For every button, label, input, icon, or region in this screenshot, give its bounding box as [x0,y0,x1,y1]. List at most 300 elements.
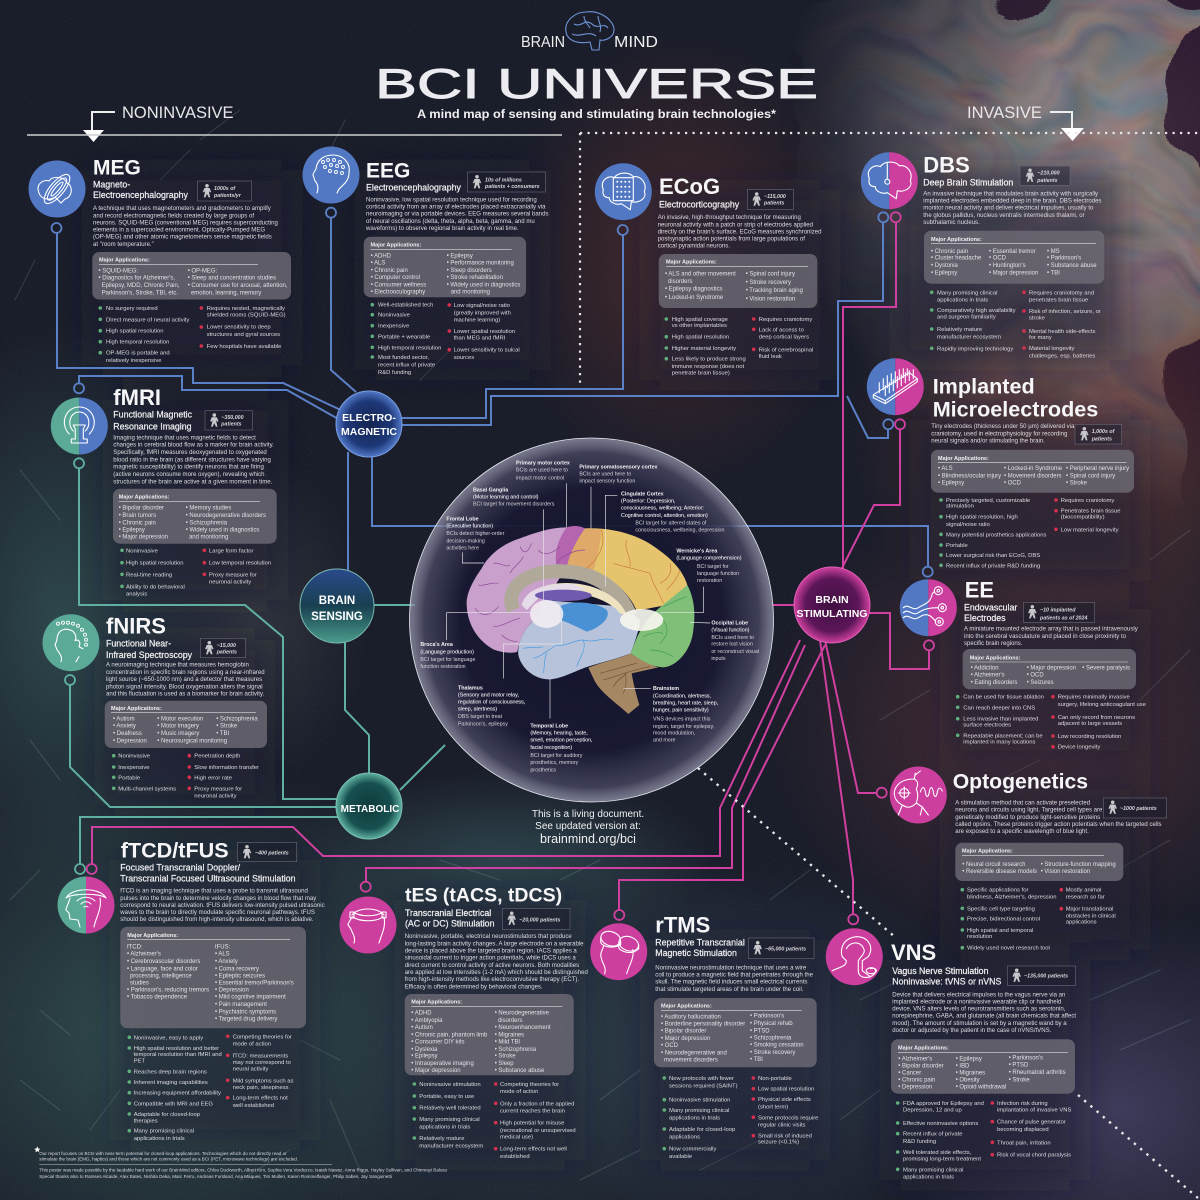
pros: FDA approved for Epilepsy and [903,1101,984,1107]
leader lines [447,483,710,718]
major applications [105,701,267,748]
hub: electromagnetic: MAGNETIC [341,426,397,438]
brain labels: restoration [697,578,722,584]
pros: Many potential prosthetics applications [946,532,1046,538]
cons: Competing theories for [233,1034,292,1040]
title: Optogenetics [953,770,1088,793]
noninvasive label and arrow: NONINVASIVE [122,104,234,122]
major applications: • Schizophrenia [216,716,258,722]
major applications: • Stroke [495,1054,516,1060]
description: directly on the brain's surface. ECoG measures synchronized [658,229,822,235]
cons: Low recording resolution [1058,734,1121,740]
description: sinusoidal current to trigger action potentials, while tDCS uses a [405,956,576,962]
major applications: • Mild TBI [495,1040,520,1046]
pros: surface electrodes [963,723,1011,729]
footnote: This poster was made possible by the laudable hard work of our BrainMind editors, Chloe Duckworth, Albert Kim, Sophia Vera Verduzco, Isaiah Nawaz, Anna Riggs, Hayley Sullivan, and Chinmayi Balusu [39,1167,448,1172]
major applications: • Coma recovery [215,966,259,972]
subtitle: Vagus Nerve Stimulation [892,966,989,976]
title: EEG [366,159,410,182]
major applications: • Neurodegenerative and [661,1050,727,1056]
patient badge [1103,798,1167,818]
major applications: • ADHD [411,1011,432,1017]
description: An invasive, high-throughput technique for measuring [658,215,801,221]
pros: Increasing equipment affordability [134,1091,221,1097]
patient badge [198,181,252,201]
cons [752,317,813,360]
major applications: • OCD [1027,673,1044,679]
cons: Major translational [1066,907,1113,913]
major applications: disorders [498,1018,522,1024]
pros [939,498,1046,569]
subtitle: Electroencephalography [93,190,188,200]
pros: Adaptable for closed-loop [134,1112,200,1118]
major applications: • Parkinson's [1047,256,1081,262]
title: MEG [93,156,141,180]
major applications: • Auditory hallucination [661,1014,721,1020]
description: device. VNS alters levels of neurotransmitters such as serotonin, [892,1006,1066,1012]
major applications: tFUS: [215,945,231,951]
panel: ECoG [595,163,822,377]
description: mood). The amount of stimulation is set by a magnetic wand by a [892,1021,1067,1027]
header: logo [521,12,658,51]
major applications: • Migraines [495,1032,524,1038]
major applications: • Parkinson's, reducing tremors [127,987,209,993]
major applications: • Locked-in Syndrome [665,295,724,301]
cons: fTCD: measurements [233,1053,288,1059]
icon: DBS [861,152,918,222]
patient badge [1023,602,1095,622]
major applications: • Huntington's [989,263,1026,269]
title: EE [965,577,994,602]
cons: may not correspond to [233,1060,291,1066]
major applications: • Stroke recovery [746,280,791,286]
pros [896,1101,984,1181]
brain labels: restore lost vision [711,642,753,648]
patient badge [747,189,793,209]
pros: OP-MEG is portable and [106,351,170,357]
brain labels: breathing, heart rate, sleep, [653,700,718,706]
cons [1060,888,1116,925]
major applications: • SQUID-MEG: [98,268,139,274]
hub: brain stimulating [794,567,870,643]
footnote [34,1146,448,1179]
cons: (short term) [758,1104,788,1110]
title: VNS [891,940,936,965]
pros: Noninvasive stimulation [669,1098,730,1104]
cons: obstacles in clinical [1066,913,1116,919]
pros [412,1082,483,1149]
cons: neuronal activity [194,794,237,800]
cons: Small risk of induced [758,1134,812,1140]
description: Tiny electrodes (thickness under 50 µm) delivered via [931,424,1075,430]
brain labels: Occipital Lobe [711,620,748,626]
pros: Portable + wearable [378,334,430,340]
patient badge [1007,966,1076,985]
pros: Higher material longevity [672,346,736,352]
patient badge: patients + consumers [484,184,540,190]
description: pulses into the brain to determine velocity changes in blood flow that may [120,896,317,902]
major applications: and monitoring [189,535,228,541]
hub: electromagnetic [336,391,402,457]
brain labels: Cingulate Cortex [621,491,664,497]
description: structures of the brain are active at a given moment in time. [113,479,273,485]
major applications: movement disorders [664,1058,718,1064]
subtitle: Focused Transcranial Doppler/ [120,863,241,873]
pros: Comparatively high availability [937,308,1016,314]
cons [1051,695,1146,751]
patient badge [205,411,252,430]
major applications: • IBD [956,1063,969,1069]
patient badge [200,638,246,658]
major applications: • Spinal cord injury [746,272,795,278]
description: An invasive technique that modulates brain activity with surgically [923,192,1099,198]
panel: rTMS [590,910,818,1160]
brain labels: smell, emotion perception, [530,738,593,744]
brain labels: impact motor control [516,475,564,481]
major applications: • Anxiety [215,959,238,965]
cons: (biocompatibility) [1061,515,1105,521]
major applications: • Bipolar disorder [898,1063,944,1069]
pros [960,888,1056,952]
pros: High spatial resolution, high [946,515,1018,521]
panel: fNIRS [42,613,267,800]
title: ECoG [659,174,720,199]
cons: Large form factor [209,548,254,554]
hub: brain stimulating: BRAIN [815,594,849,606]
hub: metabolic [336,773,402,839]
major applications: • Bipolar disorder [661,1029,706,1035]
pros: R&D funding [378,370,411,376]
pros: analysis [126,592,147,598]
brain labels: (Posterior: Depression, [621,499,675,505]
major applications: • Stroke rehabilitation [447,275,503,281]
major applications [113,489,277,544]
description: and this fluctuation is used as a biomarker for brain activity. [106,691,265,697]
patient badge: ~210,000 [1037,171,1060,177]
pros: Noninvasive [378,313,410,319]
patient badge: patients [763,201,784,207]
major applications: and monitoring [451,290,490,296]
pros: Adaptable for closed-loop [669,1127,735,1133]
patient badge: ~135,000 patients [1024,973,1068,979]
major applications: • Sleep [495,1061,514,1067]
cons: Mental health side-effects [1029,329,1096,335]
description: and record electromagnetic fields created by large groups of [93,213,254,219]
pros: Many promising clinical [134,1129,194,1135]
pros: Relatively well tolerated [419,1106,481,1112]
panel: EEG [302,146,549,376]
panel: fTCD/tFUS [58,838,325,1142]
major applications: • Consumer DIY kits [411,1040,464,1046]
pros: stimulation [946,503,974,509]
pros: available [669,1154,692,1160]
cons [200,306,286,350]
major applications [931,450,1134,493]
cons: Device longevity [1058,745,1100,751]
major applications: • Physical rehab [750,1021,793,1027]
noninvasive label and arrow [27,104,562,142]
pros: High spatial resolution [106,329,164,335]
cons: adjacent to large vessels [1058,721,1122,727]
brain labels: BCI target for movement disorders [473,501,555,507]
major applications: • Pain management [215,1002,267,1008]
cons: Chance of pulse generator [997,1120,1066,1126]
title: BCI UNIVERSE [375,60,818,107]
description: neurons. SQUID-MEG (conventional MEG) requires superconducting [93,221,278,227]
panel: fMRI [51,383,277,598]
patient badge: ~115,000 [764,194,786,200]
pros: Relatively mature [937,327,982,333]
pros: promising long-term treatment [903,1157,981,1163]
major applications: • Structure-function mapping [1041,862,1116,868]
patient badge: ~20,000 patients [519,917,560,923]
pros: Depression, 12 and up [903,1107,962,1113]
cons: Throat pain, irritation [997,1140,1051,1146]
cons: becoming displaced [997,1127,1049,1133]
pros: applications in trials [903,1175,954,1181]
pros: and surgeon familiarity [937,315,996,321]
pros: Recent influx of private R&D funding [946,563,1040,569]
major applications: • ALS and other movement [665,272,736,278]
cons: Requires nested, magnetically [207,306,285,312]
major applications: • Brain tumors [119,513,156,519]
major applications: • Chronic pain [931,249,968,255]
cons: Penetrates brain tissue [1061,509,1120,515]
brain labels: Cognitive control, attention, emotion) [621,513,708,519]
major applications: • TBI [1047,270,1060,276]
major applications: • Depression [215,987,249,993]
major applications: • Intraoperative imaging [411,1061,474,1067]
major applications: • Seizures [1027,680,1054,686]
major applications: • OCD [1004,481,1021,487]
description: blood ratio in the brain (as different structures have varying [113,457,271,463]
major applications: • Substance abuse [1047,263,1097,269]
description: Specifically, fMRI measures deoxygenated to oxygenated [113,450,267,456]
brain labels: facial recognition) [530,745,572,751]
major applications [405,994,574,1075]
pros: manufacturer ecosystem [937,334,1001,340]
major applications: • Chronic pain, phantom limb [411,1032,488,1038]
major applications: • Language, face and color [127,966,198,972]
cons: neural activity [233,1067,269,1073]
major applications: • Schizophrenia [186,520,228,526]
cons: High error rate [194,775,232,781]
pros: temporal resolution than fMRI and [134,1052,222,1058]
major applications: • Chronic pain [898,1078,935,1084]
brain labels: impact sensory function [579,478,635,484]
major applications: • TBI [750,1057,763,1063]
major applications: Major Applications: [119,495,170,501]
pros: High spatial resolution [126,561,184,567]
panel: DBS [861,152,1104,359]
cons: deep cortical layers [759,335,809,341]
major applications [659,254,817,308]
brain labels: consciousness, wellbeing; Anterior: [621,506,704,512]
pros: Effective noninvasive options [903,1121,978,1127]
major applications: • Substance abuse [495,1068,545,1074]
cons: neuronal activity [209,580,251,586]
major applications: • ALS [371,261,385,267]
pros: New protocols with fewer [669,1076,734,1082]
cons: Mild symptoms such as [233,1078,294,1084]
description: craniotomy, used in electrophysiology for recording [931,431,1067,437]
pros: Many promising clinical [903,1167,963,1173]
major applications: • Chronic pain [119,520,156,526]
brain labels: hunger, pain sensitivity) [653,708,709,714]
major applications: • PTSD [1009,1063,1028,1069]
major applications: • Essential tremor/Parkinson's [215,980,294,986]
pros [112,754,176,792]
pros: Can reach deeper into CNS [963,705,1035,711]
major applications: • Epilepsy [931,270,957,276]
brain labels: (Executive function) [446,524,493,530]
brain labels: (Sensory and motor relay, [458,692,519,698]
description: monitor neural activity and deliver electrical impulses, usually to [923,206,1094,212]
cons: Mostly animal [1066,888,1101,894]
major applications: • Epilepsy [956,1056,982,1062]
cons: Long-term effects not [233,1096,288,1102]
description: A miniature mounted electrode array that is passed intravenously [964,627,1139,633]
dotted diagonal divider [698,768,1198,1198]
pros: vs other implantables [672,323,727,329]
subtitle: Deep Brain Stimulation [923,178,1013,188]
subtitle: Resonance Imaging [113,421,192,431]
cons: Low signal/noise ratio [454,303,510,309]
brain labels: Frontal Lobe [446,516,479,522]
major applications: • Alzheimer's [898,1056,932,1062]
pros: Specific applications for [967,888,1028,894]
pros: High spatial coverage [672,317,728,323]
description: concentration in specific brain regions using a near-infrared [106,670,265,676]
major applications: Major Applications: [931,237,982,243]
cons: surgery, lifelong anticoagulant use [1058,702,1146,708]
cons: regular clinic visits [758,1123,805,1129]
pros: Precisely targeted, customizable [946,498,1030,504]
description: Device that delivers electrical impulses to the vagus nerve via an [892,992,1065,998]
icon: fNIRS [42,614,100,685]
brain labels: BCI target for auditory [530,753,583,759]
major applications: • Major depression [661,1036,710,1042]
pros: Noninvasive [118,754,150,760]
description: photon signal intensity. Blood oxygenation alters the signal [106,684,263,690]
major applications: • Motor execution [157,716,203,722]
major applications: • Tracking brain aging [746,288,803,294]
cons: mode of action [500,1089,538,1095]
major applications: • Motor imagery [157,724,199,730]
major applications: • Neuroenhancement [495,1025,551,1031]
description: direct current to control activity of active neurons. Both modalities [405,963,579,969]
major applications: • Amblyopia [411,1018,443,1024]
major applications: • Autism [411,1025,433,1031]
brain labels: (Language comprehension) [676,555,742,561]
cons: Low material longevity [1061,527,1119,533]
major applications: Major Applications: [938,456,989,462]
cons: well established [232,1103,274,1109]
description: A technique that uses magnetometers and gradiometers to amplify [93,206,272,212]
subtitle: Functional Near- [106,639,171,649]
pros: High spatial resolution [672,335,729,341]
cons: penetrates brain tissue [1029,298,1088,304]
major applications: • ALS [215,952,230,958]
major applications: • Vision restoration [746,296,795,302]
brain labels: activities here [446,546,479,552]
major applications: • Stroke [1009,1077,1030,1083]
pros: therapies [134,1119,158,1125]
brain labels: BCIs detect higher-order [446,531,505,537]
pros: Portable, easy to use [419,1094,474,1100]
title: tES (tACS, tDCS) [405,885,562,907]
pros: Noninvasive [126,548,158,554]
brain labels: sleep, alertness) [458,706,497,712]
cons: Slow information transfer [194,765,259,771]
cons: Risk of infection, seizure, or [1029,309,1101,315]
brain labels: and more [653,738,676,744]
pros: Direct measure of neural activity [106,317,190,323]
major applications: Major Applications: [661,1004,712,1010]
pros [662,1076,738,1160]
brain labels: Wernicke's Area [676,549,717,555]
pros: Repeatable placement; can be [963,733,1043,739]
cons: Non-portable [758,1076,792,1082]
panel: VNS [826,914,1076,1181]
pros: Real-time reading [126,572,172,578]
description: A stimulation method that can activate preselected [955,800,1090,806]
description: specific brain regions. [964,641,1023,647]
major applications: • Spinal cord injury [1066,473,1115,479]
major applications: • Obesity [956,1078,980,1084]
cons [1022,290,1101,359]
cons: High potential for misuse [500,1121,564,1127]
description: neural signals and/or stimulating the brain. [931,438,1045,444]
cons: Requires minimally invasive [1058,695,1130,701]
major applications: • Performance monitoring [447,261,514,267]
cons [202,548,271,586]
cons: challenges, esp. batteries [1029,353,1095,359]
description: (active neurons consume more oxygen), revealing which [113,472,265,478]
cons [1054,498,1120,533]
major applications: • Essential tremor [989,249,1036,255]
cons: Risk of cerebrospinal [759,347,813,353]
major applications: • Sleep disorders [447,268,492,274]
icon: EEG [302,146,360,218]
cons: than MEG and fMRI [454,335,506,341]
major applications: • Schizophrenia [750,1035,792,1041]
title: Implanted [933,373,1035,398]
cons: Long-term effects not well [500,1147,567,1153]
subtitle: Infrared Spectroscopy [106,650,193,660]
subtitle: Electrodes [964,613,1006,623]
patient badge [502,908,570,929]
major applications: • Memory studies [186,506,231,512]
description: doctor or adjusted by the patient in the case of nVNS/tVNS. [892,1028,1052,1034]
subtitle: Magneto- [93,180,130,190]
hub: brain sensing: SENSING [311,611,363,623]
brain labels: Primary motor cortex [516,461,570,467]
header: logo: BRAIN [521,34,565,51]
footnote: Special thanks also to Ramses Alcaide, Alex Bates, Nishita Deka, Marc Ferro, Andreas Forsland, Ana Maques, Tim Mullen, Karen Rommelfanger, Philip Sabes, Jay Sanguinetti [39,1174,392,1179]
major applications: • Movement disorders [1004,473,1062,479]
cons: implantation of invasive VNS [997,1107,1071,1113]
brain labels: decision-making [446,538,485,544]
major applications: • Epilepsy [447,254,473,260]
cons: Lack of access to [759,327,804,333]
invasive label and arrow [580,104,1200,388]
description: from high-intensity methods like electroconvulsive therapy (ECT). [405,977,579,983]
description: cortical pyramidal neurons. [658,243,730,249]
brain labels: BCI target for [697,564,729,570]
pros: Lower surgical risk than ECoG, DBS [946,553,1040,559]
pros: Less invasive than implanted [963,717,1038,723]
